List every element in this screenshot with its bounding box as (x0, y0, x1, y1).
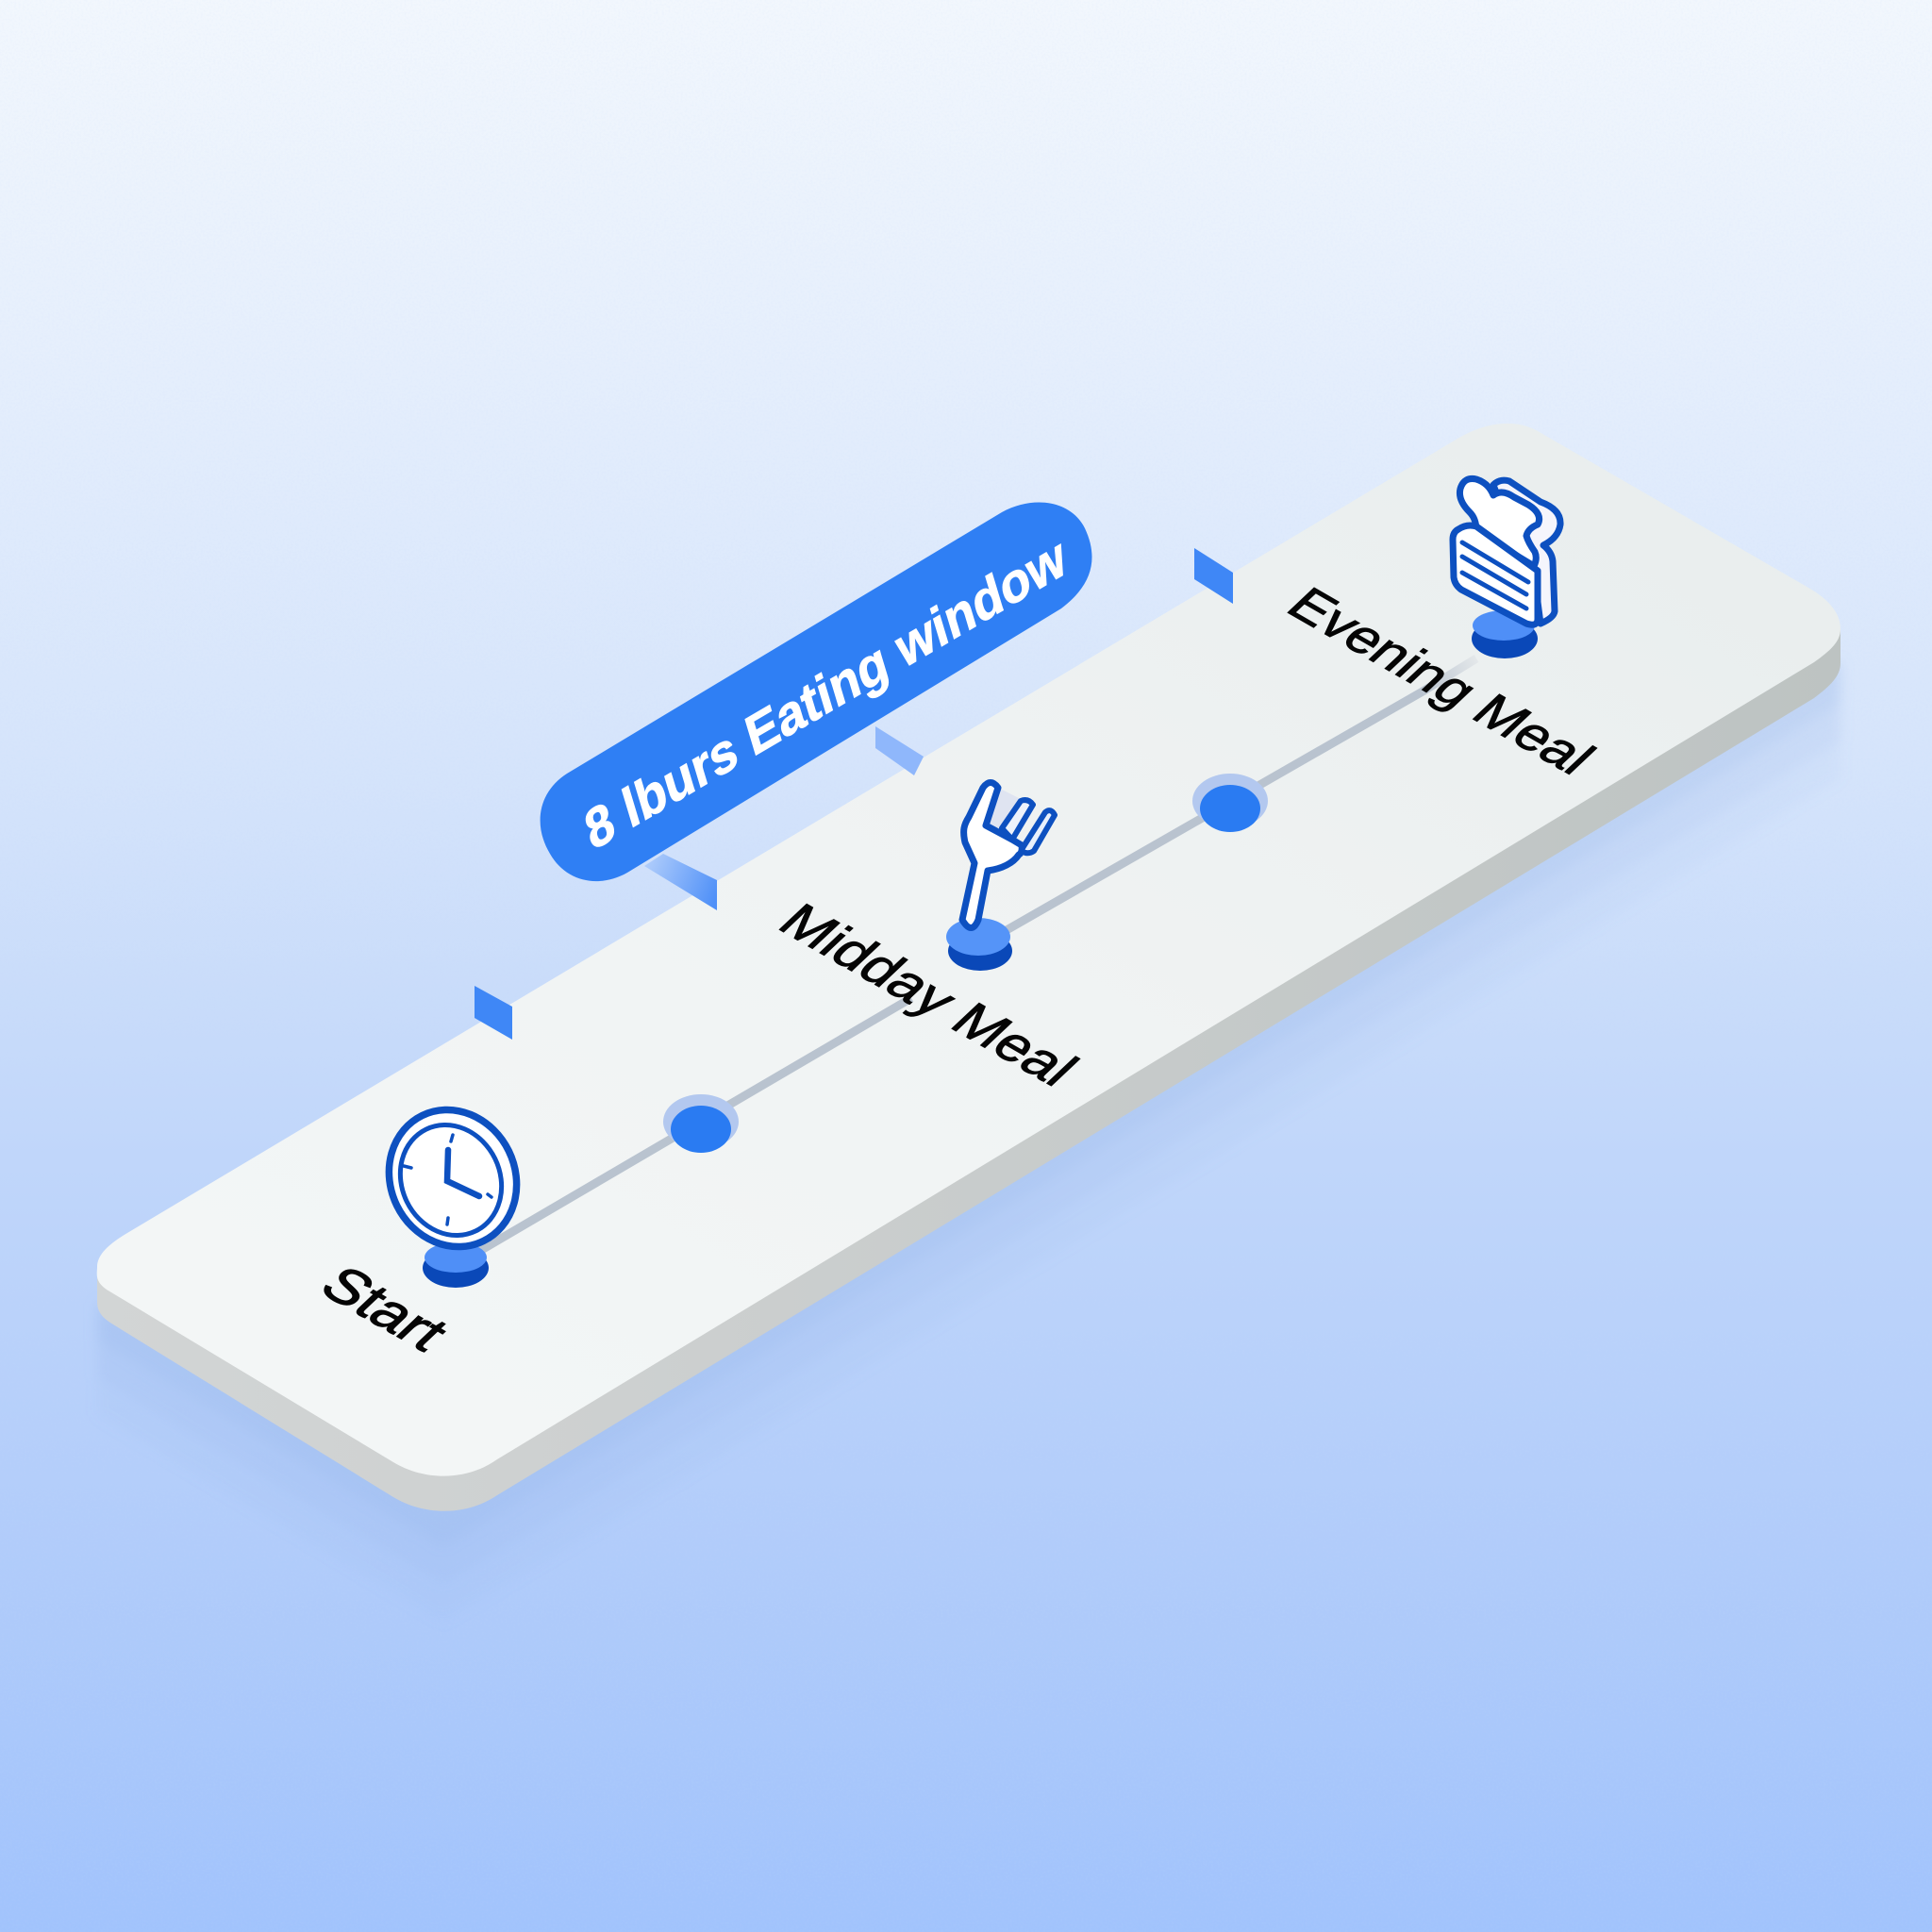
icon: clock (366, 1089, 540, 1268)
platform side (97, 629, 1840, 1511)
pill connector legs (644, 726, 924, 910)
timeline dot: first interval (663, 1094, 739, 1153)
connector tab: window start (475, 986, 512, 1040)
icon: fork (962, 783, 1055, 928)
panel: isometric timeline platform (97, 424, 1840, 1511)
marker base: evening (1472, 610, 1538, 658)
label: midday meal: Midday Meal (767, 894, 1090, 1096)
connector tab: window end (1194, 548, 1233, 604)
label: evening meal: Evening Meal (1275, 578, 1607, 784)
timeline line (456, 658, 1476, 1265)
timeline dot: second interval (1192, 774, 1268, 832)
platform top surface (97, 424, 1840, 1476)
platform reflection (97, 660, 1840, 1623)
icon: toast in toaster (1453, 478, 1560, 625)
label: start: Start (308, 1256, 461, 1360)
marker base: start (423, 1242, 489, 1288)
callout text: 8 lburs Eating window (578, 525, 1073, 862)
callout: eating window pill (541, 503, 1092, 881)
marker base: midday (946, 918, 1012, 971)
